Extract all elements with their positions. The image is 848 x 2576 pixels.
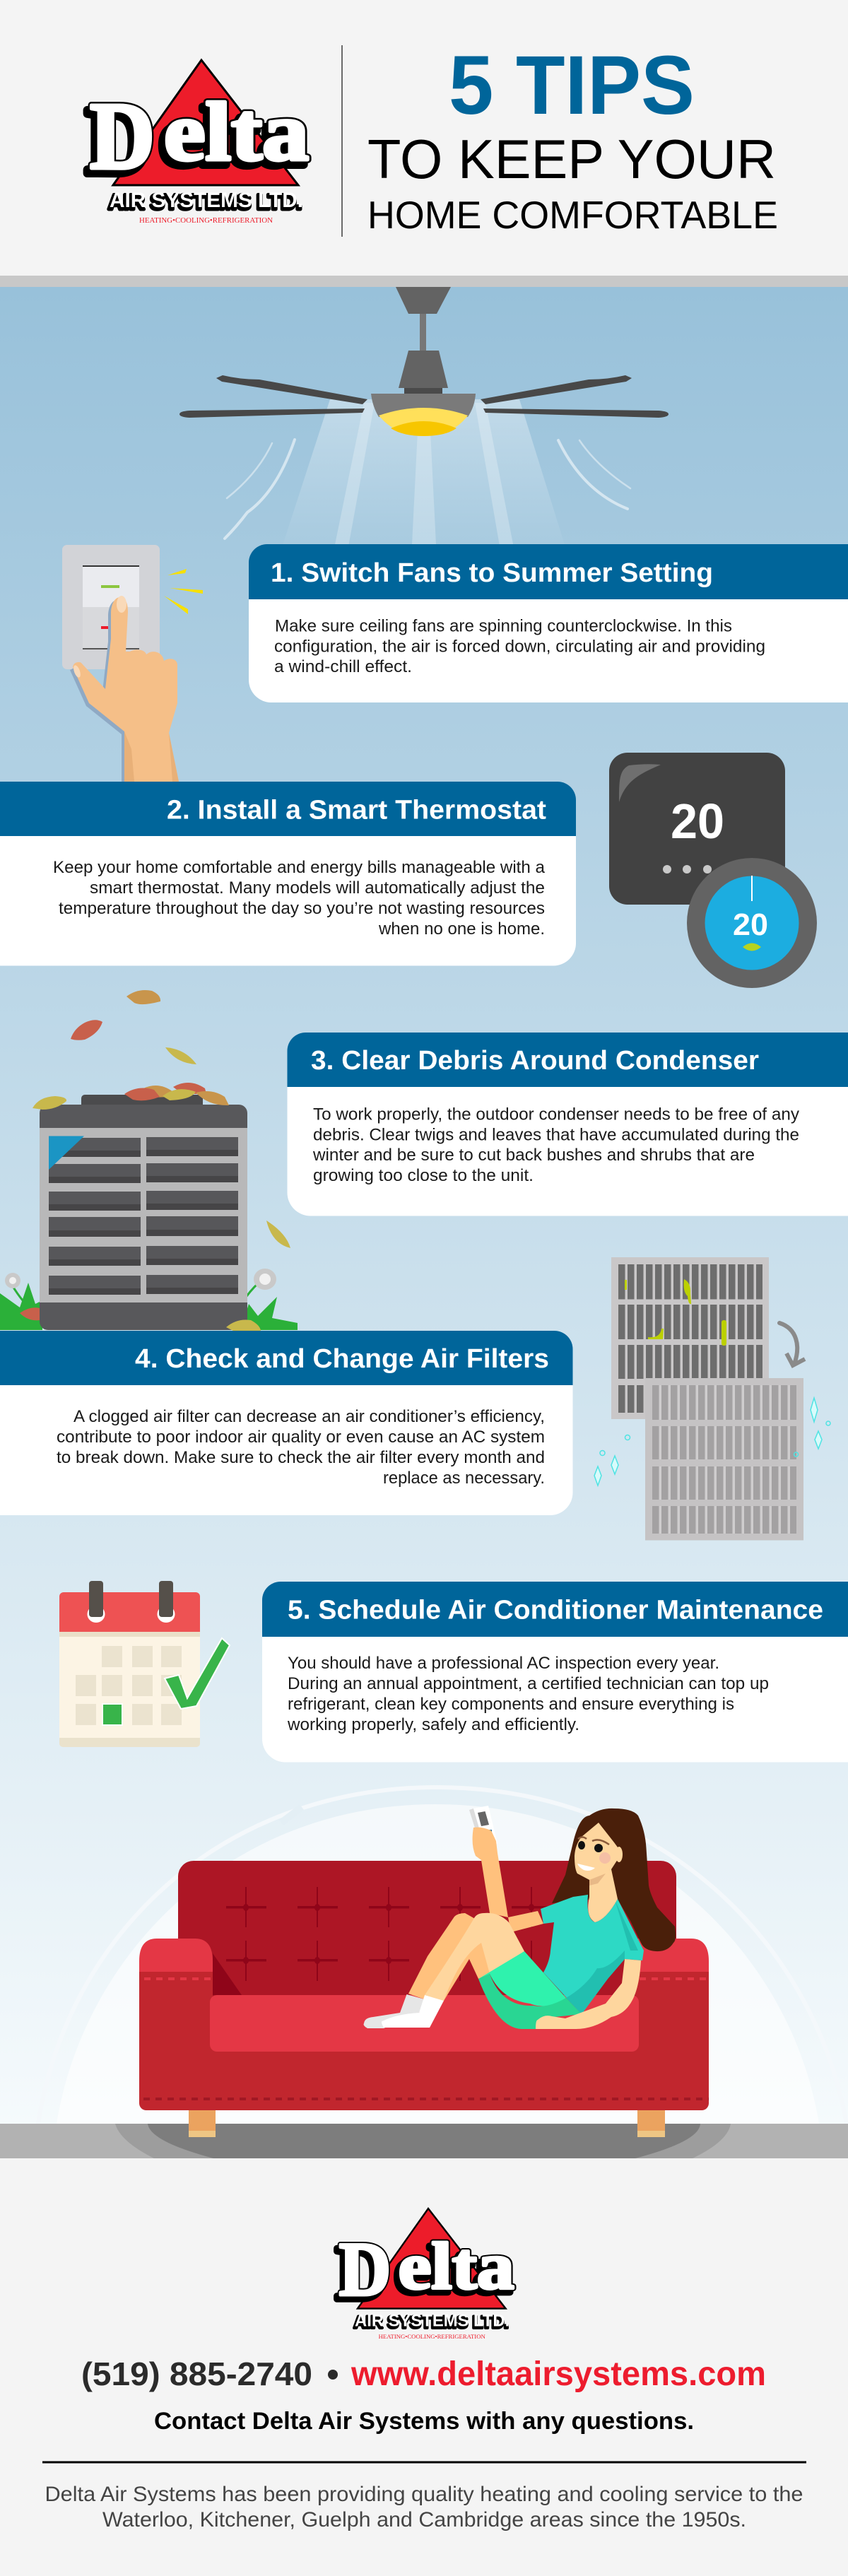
logo: Delta Air Systems: D [90,83,155,189]
panel: tip 1 [249,544,848,702]
tip 5 body [262,1637,848,1763]
tip 3 body: growing too close to the unit. [313,1166,534,1185]
icon: smart thermostats: 20 [671,794,724,849]
tip 3 heading: 3. Clear Debris Around Condenser [311,1046,759,1076]
hair back [552,1809,676,1951]
footer logo: Delta Air Systems: D [339,2226,391,2312]
logo: Delta Air Systems: elta [164,86,309,178]
footer logo: Delta Air Systems: D [336,2230,387,2316]
icon: condenser with leaves and grass [0,990,298,1331]
panel: tip 4 [0,1331,572,1515]
dirty filter [611,1257,769,1419]
about text: Delta Air Systems has been providing quality heating and cooling service to the [45,2483,803,2506]
header background [0,0,848,276]
logo: Delta Air Systems: D [90,83,155,189]
tip 5 body: You should have a professional AC inspection every year. [288,1654,719,1673]
tip 3 body [287,1087,848,1216]
tip 1 body: configuration, the air is forced down, circulating air and providing [274,637,765,656]
footer logo: Delta Air Systems [336,2209,514,2340]
raised arm [473,1828,508,1917]
logo: Delta Air Systems: AIR SYSTEMS LTD. [110,189,303,212]
unit [81,1095,203,1109]
logo: Delta Air Systems: D [86,88,151,194]
footer logo: Delta Air Systems: AIR SYSTEMS LTD. [353,2313,509,2332]
tip 2 body: temperature throughout the day so you’re not wasting resources [59,899,545,918]
far leg [408,1913,490,2001]
tip 4 body: A clogged air filter can decrease an air conditioner’s efficiency, [73,1407,545,1426]
logo: Delta Air Systems: HEATING•COOLING•REFRIGERATION [139,217,273,225]
title: HOME COMFORTABLE [367,194,778,237]
title [367,39,778,237]
sky background [0,287,848,2124]
logo: Delta Air Systems: elta [160,90,305,183]
clean filter [645,1378,803,1541]
near sock [382,1995,444,2028]
footer background [0,2158,848,2576]
about text [45,2483,803,2531]
face and neck [575,1823,622,1922]
ceiling fan [179,287,669,558]
tip 3 heading [287,1033,848,1087]
grass [0,1283,298,1330]
tip 4 body: replace as necessary. [383,1469,545,1488]
footer logo: Delta Air Systems: elta [395,2233,511,2307]
couch [139,1861,709,2137]
tip 2 body [0,836,576,965]
icon: smart thermostats: 20 [733,907,768,942]
footer logo: Delta Air Systems: elta [399,2230,514,2303]
tip 5 heading: 5. Schedule Air Conditioner Maintenance [288,1596,823,1625]
contact phone and website: (519) 885-2740 [81,2356,312,2392]
panel: tip 3 [287,1033,848,1216]
footer logo: Delta Air Systems: HEATING•COOLING•REFRIGERATION [379,2334,485,2340]
tip 2 body: Keep your home comfortable and energy bills manageable with a [53,858,546,877]
tip 4 body: to break down. Make sure to check the air filter every month and [57,1448,545,1467]
contact phone and website: www.deltaairsystems.com [351,2356,766,2393]
title: 5 TIPS [449,39,695,132]
tip 4 body: contribute to poor indoor air quality or even cause an AC system [57,1428,545,1447]
logo: Delta Air Systems: elta [164,86,309,178]
shirt [541,1895,644,2014]
logo: Delta Air Systems: AIR SYSTEMS LTD. [108,191,302,214]
tip 5 body: During an annual appointment, a certified technician can top up [288,1674,769,1693]
floor [0,2124,848,2158]
dome behind couch [38,1787,847,2124]
panel: tip 5 [262,1582,848,1763]
footer logo: Delta Air Systems: elta [399,2230,514,2303]
contact phone and website [81,2356,766,2393]
icon: smart thermostats [609,753,817,988]
arrow [779,1323,805,1365]
tip 4 body [0,1385,572,1515]
shorts [478,1951,566,2006]
tip 1 heading [249,544,848,599]
tip 5 body: refrigerant, clean key components and ensure everything is [288,1695,734,1714]
about text: Waterloo, Kitchener, Guelph and Cambridge areas since the 1950s. [102,2508,746,2531]
footer logo: Delta Air Systems: D [339,2226,391,2312]
tip 5 body: working properly, safely and efficiently. [287,1715,579,1734]
logo: Delta Air Systems [86,60,309,225]
near leg [425,1913,524,2001]
tip 2 body: smart thermostat. Many models will automatically adjust the [90,878,545,898]
lower arm [536,1959,641,2029]
panel: tip 2 [0,782,576,965]
sparkles [594,1398,830,1486]
tip 4 heading [0,1331,572,1385]
tip 3 body: To work properly, the outdoor condenser needs to be free of any [313,1105,799,1124]
tip 4 heading: 4. Check and Change Air Filters [135,1344,549,1374]
remote [469,1806,497,1848]
leaves [33,990,290,1331]
tip 1 body: Make sure ceiling fans are spinning counterclockwise. In this [275,616,732,636]
tip 1 body: a wind-chill effect. [274,657,412,676]
tip 1 body [249,599,848,702]
footer logo: Delta Air Systems: AIR SYSTEMS LTD. [355,2311,510,2330]
tip 1 heading: 1. Switch Fans to Summer Setting [271,558,713,588]
far sock [364,1994,425,2028]
tip 2 body: when no one is home. [378,919,545,939]
woman with remote [364,1806,676,2029]
title: TO KEEP YOUR [367,128,776,190]
tip 2 heading: 2. Install a Smart Thermostat [167,796,546,825]
icon: calendar with check mark [59,1581,230,1747]
contact call to action: Contact Delta Air Systems with any questions. [154,2408,694,2435]
tip 3 body: winter and be sure to cut back bushes and shrubs that are [312,1146,755,1165]
icon: hand pressing light switch [62,545,203,784]
icon: air filters [594,1257,830,1541]
tip 5 heading [262,1582,848,1637]
tip 2 heading [0,782,576,836]
tip 3 body: debris. Clear twigs and leaves that have accumulated during the [313,1125,799,1145]
ceiling band [0,276,848,287]
